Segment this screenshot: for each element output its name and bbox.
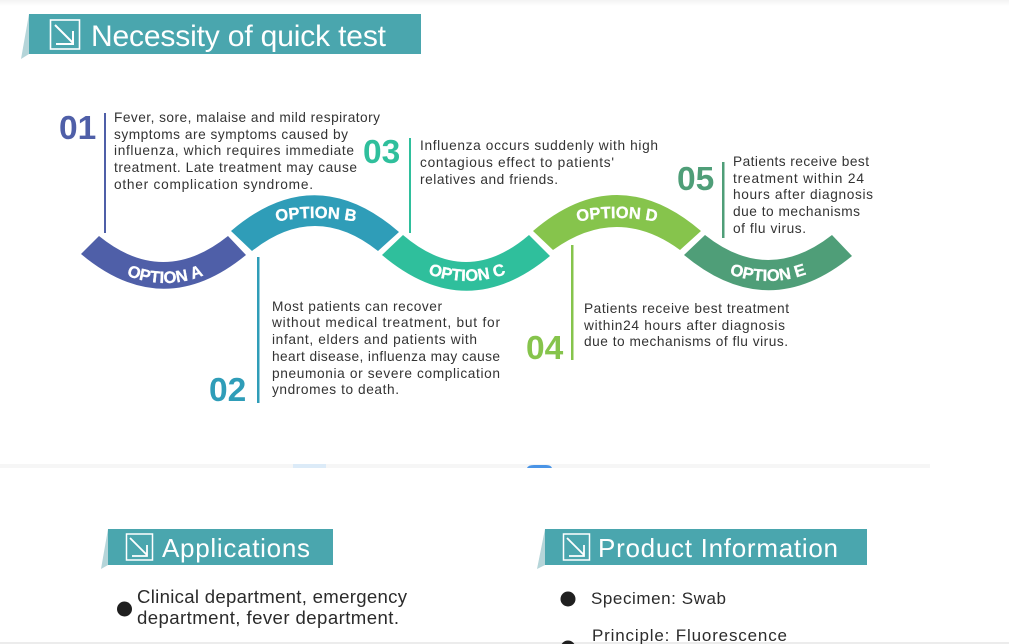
block 01	[59, 110, 380, 233]
ribbon: option C: OPTION C	[430, 264, 505, 282]
ribbon: option A	[81, 236, 246, 289]
ribbon: option A: OPTION A	[128, 266, 204, 284]
block 05: Patients receive best	[733, 154, 869, 169]
block 03	[363, 134, 658, 233]
heading: Applications: Applications	[162, 533, 310, 563]
block 02: infant, elders and patients with	[272, 332, 477, 347]
ribbon: option B	[231, 195, 399, 251]
ribbon: option E: OPTION E	[731, 264, 806, 282]
block 02: yndromes to death.	[272, 382, 399, 397]
block 02: pneumonia or severe complication	[272, 366, 500, 381]
block 05: hours after diagnosis	[733, 187, 873, 202]
block 03: contagious effect to patients'	[420, 155, 614, 170]
heading: Product Information: Product Information	[598, 533, 838, 563]
block 01: other complication syndrome.	[114, 177, 313, 192]
block 05: treatment within 24	[733, 171, 864, 186]
block 04: due to mechanisms of flu virus.	[584, 334, 788, 349]
block 02: Most patients can recover	[272, 299, 442, 314]
icon: arrow box	[564, 534, 590, 560]
list: product information	[560, 589, 787, 644]
block 05: 05	[677, 161, 714, 198]
list: product information: Specimen: Swab	[591, 589, 726, 608]
block 04: 04	[526, 330, 564, 367]
block 03: relatives and friends.	[420, 172, 558, 187]
block 04: within24 hours after diagnosis	[583, 318, 785, 333]
block 02: 02	[209, 372, 246, 409]
ribbon: option D	[533, 195, 701, 250]
block 03: Influenza occurs suddenly with high	[420, 138, 658, 153]
list: applications	[117, 586, 408, 628]
ribbon: option E	[684, 235, 852, 290]
block 01: 01	[59, 110, 96, 147]
icon: arrow box	[50, 20, 80, 49]
list: applications: Clinical department, emergency	[137, 586, 408, 607]
block 03: 03	[363, 134, 400, 171]
block 04	[526, 245, 789, 367]
heading: Applications	[101, 529, 333, 569]
block 02: without medical treatment, but for	[271, 315, 500, 330]
block 05	[677, 154, 873, 238]
ribbon: option B: OPTION B	[276, 206, 356, 221]
ribbon: option C	[382, 235, 550, 291]
list: applications: department, fever department.	[137, 607, 399, 628]
block 04: Patients receive best treatment	[584, 301, 789, 316]
block 01: treatment. Late treatment may cause	[114, 160, 357, 175]
block 01: influenza, which requires immediate	[114, 143, 354, 158]
ribbon: option D: OPTION D	[576, 206, 658, 221]
block 01: symptoms are symptoms caused by	[114, 127, 348, 142]
block 05: due to mechanisms	[733, 204, 860, 219]
heading: Necessity of quick test: Necessity of quick test	[91, 20, 387, 53]
block 05: of flu virus.	[733, 221, 806, 236]
block 02	[209, 257, 500, 409]
heading: Product Information	[537, 529, 867, 569]
block 01: Fever, sore, malaise and mild respiratory	[114, 110, 380, 125]
icon: arrow box	[126, 534, 152, 560]
heading: Necessity of quick test	[21, 14, 421, 59]
block 02: heart disease, influenza may cause	[272, 349, 500, 364]
